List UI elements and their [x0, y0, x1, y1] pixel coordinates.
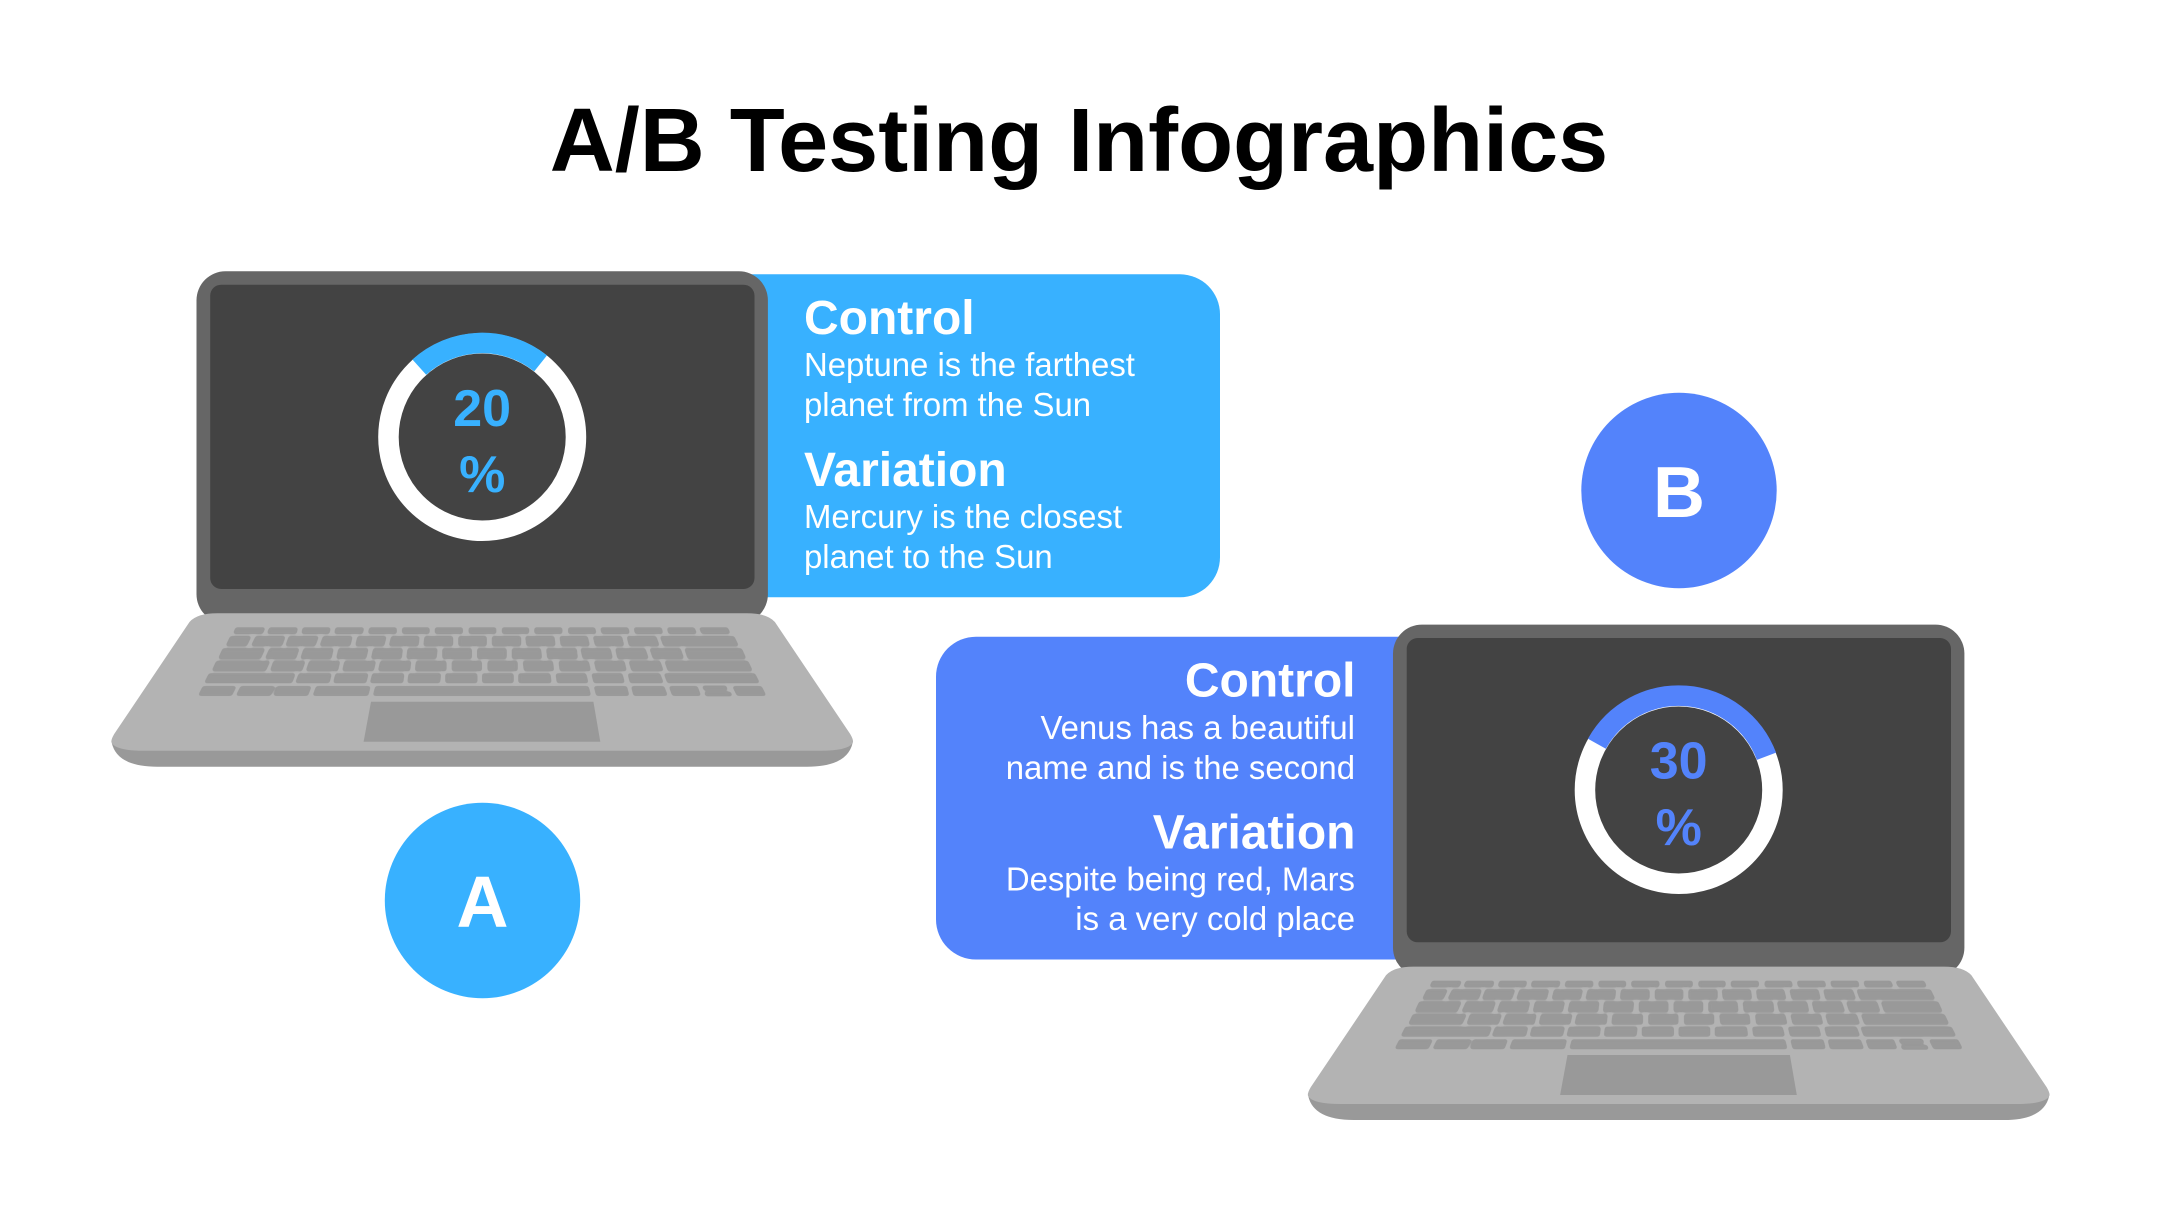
value: 30 percent: %: [1656, 799, 1702, 857]
heading: variation A: Variation: [804, 444, 1007, 497]
text: variation A description: planet to the Sun: [804, 538, 1053, 575]
badge: A: [385, 803, 580, 998]
badge: B: B: [1653, 453, 1705, 533]
text: control A description: Neptune is the farthest: [804, 346, 1135, 383]
badge: B: [1581, 393, 1777, 588]
panel: variant B description: [936, 637, 1456, 960]
text: variation B description: is a very cold place: [1075, 900, 1355, 937]
donut chart B: 30%: [1585, 696, 1772, 884]
heading: variation B: Variation: [1153, 806, 1356, 860]
laptop A: [111, 271, 853, 767]
text: variation A description: Mercury is the closest: [804, 498, 1122, 535]
title: A/B Testing Infographics: [550, 91, 1608, 191]
value: 20 percent: %: [459, 446, 505, 504]
text: control A description: planet from the Sun: [804, 386, 1091, 423]
donut chart A: 20%: [388, 343, 576, 531]
badge: A: A: [456, 863, 508, 943]
text: variation B description: Despite being red, Mars: [1006, 860, 1355, 898]
text: control B description: Venus has a beautiful: [1040, 709, 1355, 746]
panel: variant A description: [700, 274, 1220, 597]
value: 20 percent: 20: [453, 380, 511, 438]
heading: control A: Control: [804, 292, 975, 345]
laptop B: [1308, 625, 2050, 1120]
text: control B description: name and is the second: [1006, 749, 1355, 786]
heading: control B: Control: [1185, 655, 1356, 708]
value: 30 percent: 30: [1650, 733, 1708, 791]
